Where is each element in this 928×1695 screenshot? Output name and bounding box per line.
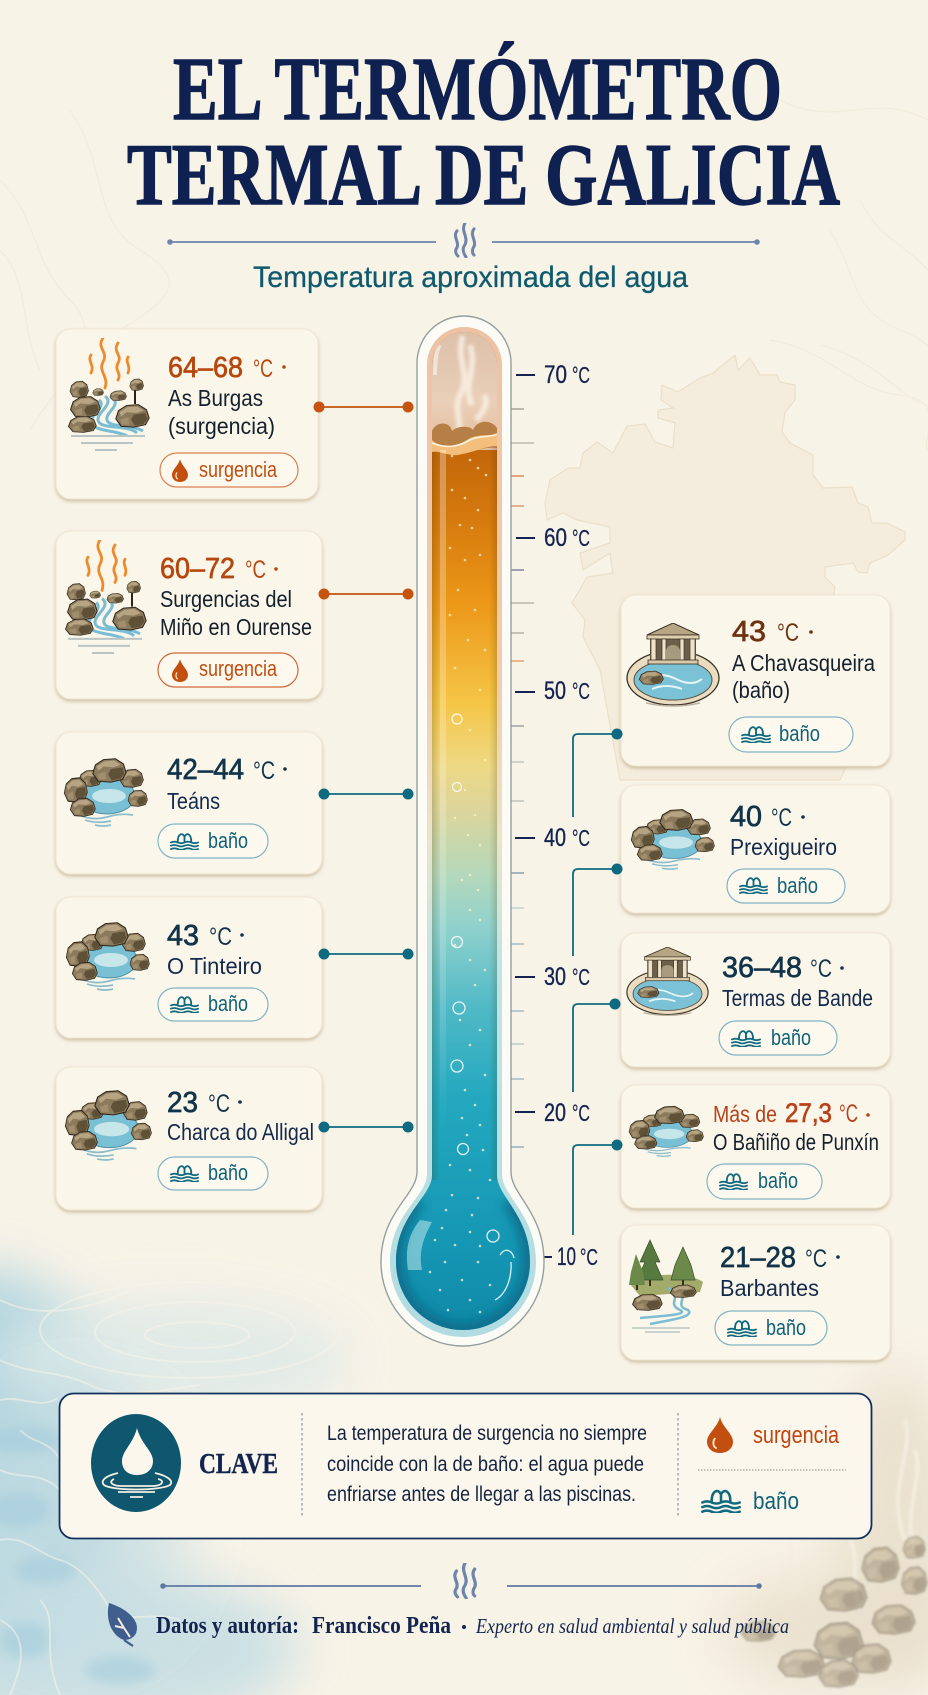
label 50: 50 xyxy=(544,677,566,705)
tag: baño: baño xyxy=(208,991,248,1016)
tag: baño xyxy=(719,1021,837,1055)
temperature: °C xyxy=(208,1090,230,1118)
temperature: 42–44 xyxy=(167,754,244,786)
footer credits: Francisco Peña xyxy=(312,1613,451,1639)
tag: baño xyxy=(158,824,268,858)
temperature: °C xyxy=(253,757,275,785)
label 60 xyxy=(544,524,590,552)
tag: baño: baño xyxy=(766,1315,806,1340)
bubbles xyxy=(451,714,514,1300)
clave label: CLAVE xyxy=(199,1448,278,1480)
card: O Bañiño de Punxín xyxy=(621,1085,890,1208)
temperature: 43 xyxy=(167,920,199,952)
name: As Burgas xyxy=(168,385,263,411)
footer credits xyxy=(156,1613,789,1639)
card: O Tinteiro xyxy=(56,897,322,1038)
connector: A Chavasqueira xyxy=(573,728,622,817)
tag: baño: baño xyxy=(758,1168,798,1193)
name xyxy=(160,586,312,640)
glass highlight xyxy=(440,450,446,1130)
clave text: coincide con la de baño: el agua puede xyxy=(327,1453,644,1476)
name: Teáns xyxy=(167,788,220,814)
label 30: 30 xyxy=(544,963,566,991)
name: (surgencia) xyxy=(168,413,275,439)
steam in the tube xyxy=(455,336,486,438)
temperature: 36–48 xyxy=(722,952,802,984)
glass inner band xyxy=(390,327,536,1337)
tag: surgencia xyxy=(160,453,298,487)
tag: surgencia: surgencia xyxy=(199,457,278,482)
clave text: enfriarse antes de llegar a las piscinas. xyxy=(327,1483,636,1506)
icon: rock pool xyxy=(65,1091,151,1160)
name: Prexigueiro xyxy=(730,834,837,860)
name: Barbantes xyxy=(720,1275,819,1301)
card: Teáns xyxy=(56,732,322,874)
top divider with steam icon xyxy=(167,223,760,257)
subtitle: Temperatura aproximada del agua xyxy=(253,261,688,294)
temperature: 40 xyxy=(730,801,762,833)
bottom divider with steam icon xyxy=(160,1563,762,1598)
background: water bottom left xyxy=(0,1270,350,1695)
tag: baño: baño xyxy=(208,1160,248,1185)
tag: baño: baño xyxy=(777,873,818,898)
temperature: 60–72 xyxy=(160,553,235,585)
icon: leaf xyxy=(108,1603,137,1646)
connector: Termas de Bande xyxy=(573,998,620,1092)
name: Surgencias del xyxy=(160,586,292,612)
temperature xyxy=(732,616,813,648)
background: rocks and steam bottom right xyxy=(720,1370,928,1690)
temperature: 43 xyxy=(732,616,766,648)
clave text: La temperatura de surgencia no siempre xyxy=(327,1422,647,1445)
card: Charca do Alligal xyxy=(56,1067,322,1210)
glass tube xyxy=(381,316,544,1346)
connector: O Bañiño de Punxín xyxy=(573,1140,622,1235)
temperature xyxy=(168,352,286,384)
connector: Prexigueiro xyxy=(573,864,622,956)
tag: surgencia: surgencia xyxy=(199,656,278,681)
background: topographic lines xyxy=(0,100,928,450)
name: Charca do Alligal xyxy=(167,1119,314,1145)
label 10: 10 xyxy=(557,1243,576,1271)
card: Barbantes xyxy=(621,1225,890,1360)
label 40: °C xyxy=(572,825,590,851)
temperature xyxy=(730,801,805,833)
label 30: °C xyxy=(572,964,590,990)
label 60: °C xyxy=(572,525,590,551)
temperature: °C xyxy=(253,355,273,383)
tag: baño xyxy=(707,1164,822,1199)
footer credits: Experto en salud ambiental y salud pública xyxy=(475,1614,789,1638)
tag: baño: baño xyxy=(771,1025,811,1050)
name xyxy=(732,650,875,703)
temperature: 21–28 xyxy=(720,1242,796,1274)
icon: temple pool xyxy=(627,623,719,706)
temperature scale xyxy=(511,361,598,1271)
icon: river and trees xyxy=(629,1240,703,1332)
label 70 xyxy=(544,361,590,389)
footer credits: Datos y autoría: xyxy=(156,1613,299,1639)
icon: rock pool xyxy=(66,923,149,990)
temperature: °C xyxy=(209,923,232,951)
tag: baño xyxy=(158,988,268,1021)
temperature xyxy=(167,1087,242,1119)
icon: rock pool xyxy=(629,1106,704,1156)
card: Termas de Bande xyxy=(621,933,890,1067)
icon: hot spring xyxy=(68,338,149,450)
liquid column xyxy=(390,330,535,1335)
temperature: °C xyxy=(777,619,799,647)
temperature: °C xyxy=(245,556,266,584)
card: As Burgas xyxy=(56,329,318,499)
temperature: °C xyxy=(771,804,792,832)
temperature: 64–68 xyxy=(168,352,243,384)
connector: Surgencias del Miño xyxy=(318,588,414,600)
temperature: 23 xyxy=(167,1087,198,1119)
label 30 xyxy=(544,963,590,991)
temperature xyxy=(167,920,244,952)
temperature: 27,3 xyxy=(785,1098,832,1128)
card: Surgencias del Miño en Ourense xyxy=(56,531,322,699)
connector: Teáns xyxy=(318,788,414,800)
connector: As Burgas xyxy=(314,402,414,412)
legend: baño xyxy=(702,1488,799,1515)
card: Prexigueiro xyxy=(621,785,890,913)
icon: rock pool xyxy=(64,759,147,826)
label 40 xyxy=(544,824,590,852)
tag: baño xyxy=(715,1311,827,1345)
temperature xyxy=(722,952,844,984)
name: A Chavasqueira xyxy=(732,650,875,676)
legend: surgencia xyxy=(707,1417,840,1453)
icon: temple pool xyxy=(627,947,708,1015)
name: O Bañiño de Punxín xyxy=(713,1129,879,1155)
temperature xyxy=(167,754,287,786)
label 40: 40 xyxy=(544,824,566,852)
connector: Charca do Alligal xyxy=(318,1122,414,1132)
title xyxy=(127,40,840,224)
label 70: °C xyxy=(572,362,590,388)
tag: surgencia xyxy=(158,653,298,687)
legend: baño: baño xyxy=(753,1488,799,1515)
label 50 xyxy=(544,677,590,705)
icon: water drop badge xyxy=(91,1414,181,1512)
name xyxy=(168,385,275,439)
card: A Chavasqueira xyxy=(621,595,890,766)
clave text xyxy=(327,1422,647,1506)
tag: baño xyxy=(158,1157,268,1190)
label 10 xyxy=(557,1243,598,1271)
temperature xyxy=(713,1098,870,1128)
label 20: °C xyxy=(572,1100,590,1126)
name: (baño) xyxy=(732,677,790,703)
icon: hot spring xyxy=(66,540,146,653)
legend: surgencia: surgencia xyxy=(753,1422,840,1449)
background: map of Galicia xyxy=(545,355,905,780)
name: O Tinteiro xyxy=(167,953,262,979)
name: Miño en Ourense xyxy=(160,614,312,640)
panel: clave xyxy=(60,1394,872,1538)
temperature: °C xyxy=(805,1245,827,1273)
temperature: °C xyxy=(810,955,832,983)
surface xyxy=(432,422,497,451)
tag: baño: baño xyxy=(779,721,820,746)
label 50: °C xyxy=(572,678,590,704)
temperature xyxy=(720,1242,840,1274)
tag: baño: baño xyxy=(208,828,248,853)
tag: baño xyxy=(727,869,845,903)
label 60: 60 xyxy=(544,524,567,552)
label 20 xyxy=(544,1099,590,1127)
label 70: 70 xyxy=(544,361,567,389)
name: Termas de Bande xyxy=(722,985,873,1011)
tag: baño xyxy=(729,717,853,752)
icon: rock pool xyxy=(631,810,714,869)
label 10: °C xyxy=(580,1244,598,1270)
connector: O Tinteiro xyxy=(318,948,414,960)
temperature: Más de xyxy=(713,1101,777,1127)
thermometer xyxy=(381,316,544,1346)
label 20: 20 xyxy=(544,1099,566,1127)
temperature: °C xyxy=(839,1100,858,1128)
temperature xyxy=(160,553,278,585)
